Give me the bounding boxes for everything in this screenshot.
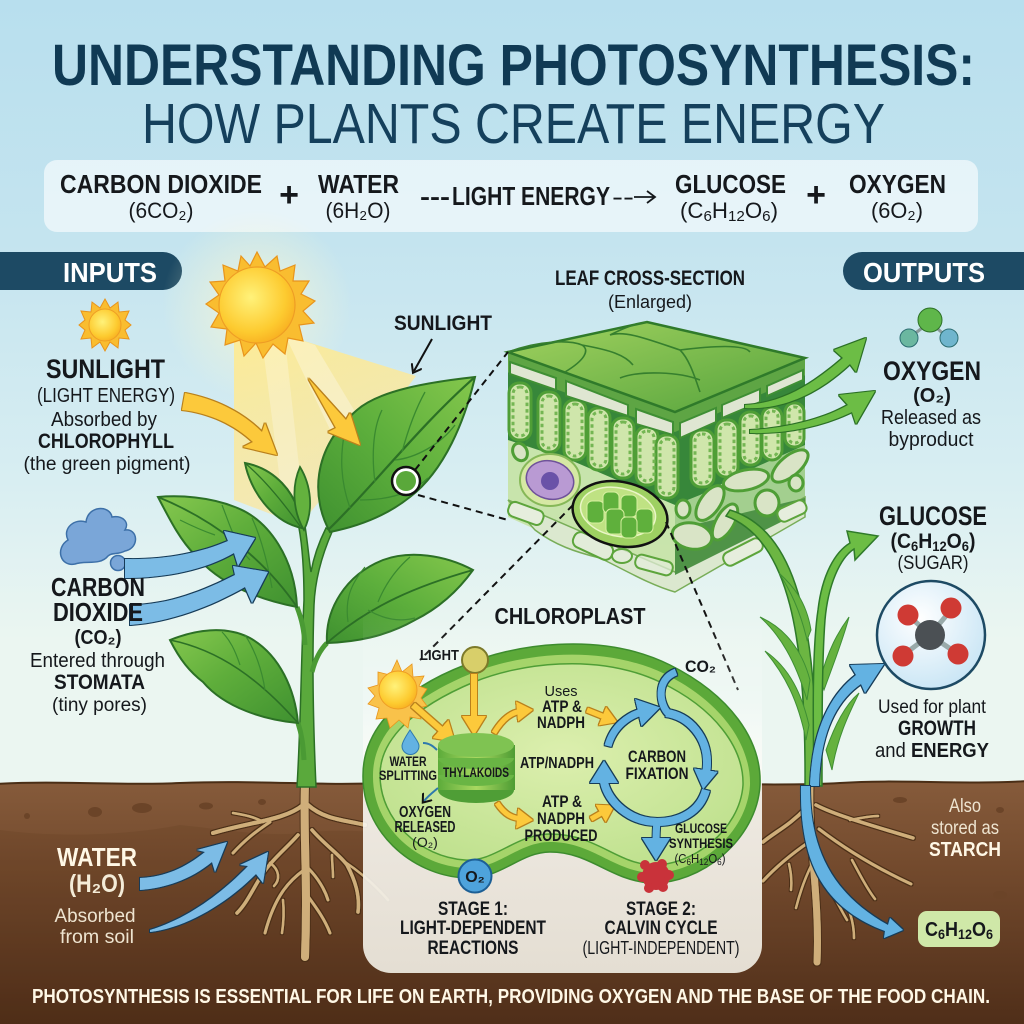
glucose use text (875, 696, 990, 762)
equation panel: H (712, 198, 728, 223)
starch storage text: Also (949, 796, 981, 817)
equation panel (44, 160, 978, 232)
sky background (0, 0, 1024, 800)
sunlight input text: SUNLIGHT (46, 354, 165, 384)
glucose synthesis text: (C (674, 852, 688, 866)
starch storage text (929, 796, 1001, 861)
carbon dioxide input text: Entered through (30, 650, 165, 672)
glucose synthesis text: 6 (686, 857, 691, 867)
right plant blades (760, 573, 859, 770)
palisade backdrop (508, 372, 805, 505)
outputs banner: OUTPUTS (863, 257, 985, 288)
lower tissue (508, 497, 805, 592)
equation panel: GLUCOSE (675, 169, 786, 199)
right plant with roots and glucose arrows (726, 510, 913, 962)
water drop and splitting label: SPLITTING (379, 768, 437, 783)
uses atp text (537, 684, 585, 732)
glucose output text: 6 (962, 538, 969, 554)
oxygen released label: (O₂) (412, 834, 438, 850)
lower left leaf (170, 630, 298, 723)
glucose output text: 12 (932, 538, 947, 554)
chloroplast heading: CHLOROPLAST (494, 603, 646, 629)
atp produced text: ATP & (542, 792, 582, 811)
glucose synthesis text: GLUCOSE (675, 821, 727, 836)
water input text: (H₂O) (69, 870, 125, 898)
thylakoid stack (438, 733, 515, 803)
palisade cells (509, 383, 804, 498)
small input sun icon (79, 299, 131, 351)
sunlight input text: Absorbed by (51, 409, 157, 431)
oxygen output text: (O₂) (913, 385, 951, 407)
glucose molecule icon (877, 581, 985, 689)
inputs banner (0, 252, 182, 290)
water input text: WATER (57, 842, 137, 872)
uses atp text: NADPH (537, 713, 585, 732)
water drop and splitting label: WATER (390, 754, 427, 769)
oxygen molecule icon (900, 308, 958, 347)
atp nadph text: ATP/NADPH (520, 755, 594, 772)
upper left leaf (158, 496, 297, 607)
oxygen output text: OXYGEN (883, 356, 981, 386)
equation panel: (6O₂) (871, 198, 923, 223)
glucose output text: H (918, 530, 932, 553)
blue arrow down to starch (801, 786, 903, 938)
stage 2 label: (LIGHT-INDEPENDENT) (582, 938, 740, 958)
equation panel: + (806, 176, 826, 214)
upper epidermis band (508, 352, 805, 432)
carbon dioxide arrows (125, 531, 268, 625)
equation panel: -- (612, 184, 634, 211)
starch formula tag (918, 911, 1000, 947)
equation panel: (6CO₂) (128, 198, 194, 223)
stage 2 label: STAGE 2: (626, 899, 696, 920)
water input text: from soil (60, 927, 134, 948)
green down arrow (470, 807, 478, 838)
sunlight input text: (LIGHT ENERGY) (37, 385, 175, 407)
glucose output text: (SUGAR) (898, 553, 968, 574)
glucose use text: Used for plant (878, 696, 987, 718)
carbon fixation text: CARBON (628, 747, 686, 766)
title (52, 33, 975, 156)
oxygen output text: byproduct (888, 429, 974, 451)
carbon dioxide input text: (CO₂) (74, 627, 122, 649)
glucose synthesis text: ) (722, 852, 726, 866)
oxygen bubble: O₂ (465, 869, 485, 886)
palisade chloroplast speckles (513, 387, 800, 494)
equation panel: 6 (762, 208, 771, 225)
leaf cross-section label: LEAF CROSS-SECTION (555, 267, 745, 290)
glucose use text: and ENERGY (875, 740, 990, 762)
glucose synthesis text: SYNTHESIS (669, 836, 733, 851)
co2 label: CO₂ (685, 657, 716, 676)
spongy floor (675, 498, 805, 575)
right plant stem (726, 510, 816, 786)
equation panel: O (745, 198, 762, 223)
carbon dioxide input text: (tiny pores) (52, 695, 147, 716)
sunlight input text: (the green pigment) (24, 454, 190, 475)
stage 1 label: STAGE 1: (438, 899, 508, 920)
glucose output text: (C (890, 530, 913, 553)
light label and sphere: LIGHT (420, 647, 459, 664)
leaf cross-section label (555, 267, 745, 312)
light label and sphere (420, 647, 488, 673)
uses atp text: Uses (544, 684, 578, 700)
nucleus cell (520, 454, 580, 506)
plant roots (213, 785, 388, 957)
leaf cross-section block (506, 322, 813, 592)
equation panel: 12 (728, 208, 745, 225)
equation panel: (C (680, 198, 703, 223)
carbon dioxide input text: STOMATA (54, 671, 145, 694)
glucose synthesis text: 12 (699, 857, 708, 867)
yellow sunlight arrows (182, 378, 360, 455)
stomata spot (392, 467, 420, 495)
sunlight input text: CHLOROPHYLL (38, 430, 174, 453)
green oxygen output arrows (745, 338, 875, 433)
carbon fixation text (626, 747, 688, 783)
starch formula tag: 6 (938, 926, 945, 942)
leaf branches (297, 607, 327, 760)
glucose output text: ) (969, 530, 976, 553)
atp produced text: PRODUCED (524, 826, 598, 845)
upper epidermis cells (510, 362, 803, 438)
starch formula tag: 12 (958, 926, 972, 942)
oxygen output text: Released as (881, 407, 981, 429)
equation panel: + (279, 176, 299, 214)
oxygen output text (881, 356, 981, 451)
blue arrow from roots up to glucose (810, 664, 884, 786)
stage 2 label (582, 899, 740, 958)
sunlight input text (24, 354, 190, 475)
right face (675, 358, 805, 592)
oxygen released label: RELEASED (394, 819, 456, 836)
stage 1 label: REACTIONS (428, 938, 518, 959)
equation panel: WATER (318, 169, 399, 199)
thylakoid stack: THYLAKOIDS (443, 764, 509, 780)
glucose output text (879, 501, 987, 574)
equation panel: 6 (703, 208, 712, 225)
glucose synthesis text (669, 821, 733, 867)
lower epidermis cells (506, 498, 809, 577)
small chloroplast sun (368, 660, 427, 728)
main plant (158, 377, 475, 957)
glucose synthesis text: 6 (717, 857, 722, 867)
green glucose arrow (813, 531, 878, 786)
water drop and splitting label (379, 730, 437, 783)
oxygen bubble (458, 860, 492, 892)
glucose use text: GROWTH (898, 717, 976, 740)
starch storage text: stored as (931, 818, 999, 839)
large top leaf (318, 377, 475, 532)
glucose output text: O (947, 530, 962, 553)
carbon fixation cycle (604, 672, 707, 845)
chloroplast body (363, 644, 760, 883)
carbon dioxide input text (30, 572, 165, 716)
glucose molecule cluster (637, 859, 674, 893)
carbon dioxide input text: CARBON (51, 572, 145, 602)
glucose output text: 6 (911, 538, 918, 554)
glucose output text: GLUCOSE (879, 501, 987, 531)
carbon fixation text: FIXATION (626, 764, 688, 783)
water input text (54, 842, 137, 948)
oxygen released label (394, 788, 456, 850)
sunlight label and pointer (394, 312, 492, 371)
plant stem (297, 526, 332, 787)
stage 1 label (400, 899, 546, 959)
sunlight beams (162, 210, 416, 525)
glucose synthesis text: H (691, 852, 699, 866)
carbon dioxide input text: DIOXIDE (53, 597, 143, 627)
uses atp text: ATP & (542, 697, 582, 716)
starch formula tag: C (925, 919, 939, 941)
stage 1 label: LIGHT-DEPENDENT (400, 918, 546, 939)
equation panel: LIGHT ENERGY (452, 181, 610, 211)
outputs banner (843, 252, 1024, 290)
top leaf surface (508, 322, 805, 412)
oxygen released label: OXYGEN (399, 804, 451, 821)
water absorption arrows (140, 842, 268, 932)
chloroplast inset (566, 473, 674, 555)
equation panel: (6H₂O) (326, 198, 390, 223)
starch formula tag: O (972, 919, 986, 941)
small spike leaf (294, 467, 310, 530)
inputs banner: INPUTS (63, 257, 157, 288)
equation panel: ) (771, 198, 778, 223)
icon: carbon dioxide cloud (61, 509, 136, 570)
right plant roots (763, 785, 913, 962)
equation panel: CARBON DIOXIDE (60, 169, 262, 199)
water input text: Absorbed (54, 906, 136, 927)
atp produced text: NADPH (537, 809, 585, 828)
zoom dashed lines (415, 352, 738, 690)
starch formula tag: 6 (986, 926, 993, 942)
soil ground (0, 781, 1024, 1024)
left face (508, 352, 675, 592)
large sun (206, 252, 315, 358)
spongy cells (510, 441, 813, 552)
yellow light arrows (413, 674, 607, 819)
right leaf (327, 555, 473, 643)
glucose synthesis text: O (708, 852, 717, 866)
small upper leaf (245, 463, 302, 528)
sunlight label and pointer: SUNLIGHT (394, 312, 492, 335)
starch formula tag: H (945, 919, 958, 941)
starch storage text: STARCH (929, 839, 1001, 861)
stage 2 label: CALVIN CYCLE (604, 918, 718, 939)
atp produced text (524, 792, 598, 845)
leaf cross-section label: (Enlarged) (608, 292, 692, 312)
equation panel: OXYGEN (849, 169, 946, 199)
chloroplast panel (363, 603, 762, 973)
title: HOW PLANTS CREATE ENERGY (142, 92, 885, 156)
equation panel: --- (420, 184, 450, 211)
